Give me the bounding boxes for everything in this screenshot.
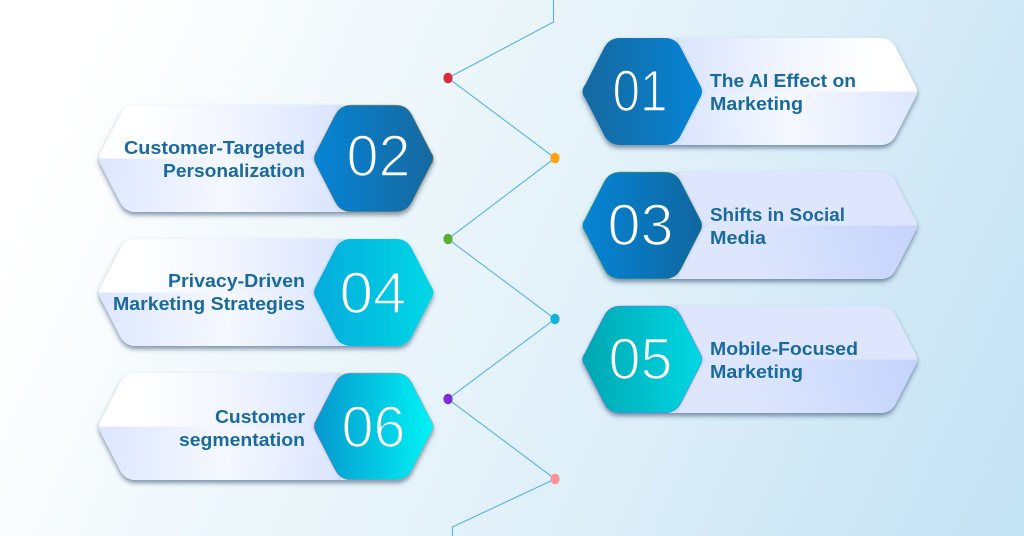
number 05: 05 (608, 327, 672, 392)
dot: purple (443, 394, 453, 404)
label 03: Shifts in Social (710, 205, 845, 225)
number 03: 03 (608, 193, 674, 258)
label 06: segmentation (179, 430, 305, 450)
dot: cyan (550, 314, 560, 324)
number 06: 06 (342, 395, 406, 460)
dot: green (443, 234, 453, 244)
label 03: Media (710, 228, 767, 248)
panel: 01 The AI Effect on Marketing (582, 38, 917, 145)
dot: orange (550, 153, 560, 163)
label 04: Privacy-Driven (168, 271, 305, 291)
card shape 03 (582, 172, 917, 279)
label 05: Marketing (710, 362, 803, 382)
dot: red (443, 73, 453, 83)
card shape 05 (582, 306, 917, 413)
card shape 04 (99, 239, 434, 346)
card shape 02 (99, 105, 434, 212)
label 01: The AI Effect on (710, 71, 856, 91)
label 06: Customer (215, 407, 305, 427)
label 02: Personalization (163, 161, 305, 181)
panel: 04 Privacy-Driven Marketing Strategies (99, 239, 434, 346)
label 05: Mobile-Focused (710, 339, 858, 359)
panel: 03 Shifts in Social Media (582, 172, 917, 279)
number 01: 01 (612, 59, 668, 124)
connector zigzag line (448, 0, 555, 536)
panel: 02 Customer-Targeted Personalization (99, 105, 434, 212)
number 04: 04 (340, 261, 406, 326)
panel: 06 Customer segmentation (99, 373, 434, 480)
label 04: Marketing Strategies (113, 294, 305, 314)
dot: pink (550, 474, 560, 484)
label 02: Customer-Targeted (124, 138, 305, 158)
number 02: 02 (346, 124, 410, 189)
card shape 06 (99, 373, 434, 480)
label 01: Marketing (710, 94, 803, 114)
panel: 05 Mobile-Focused Marketing (582, 306, 917, 413)
card shape 01 (582, 38, 917, 145)
